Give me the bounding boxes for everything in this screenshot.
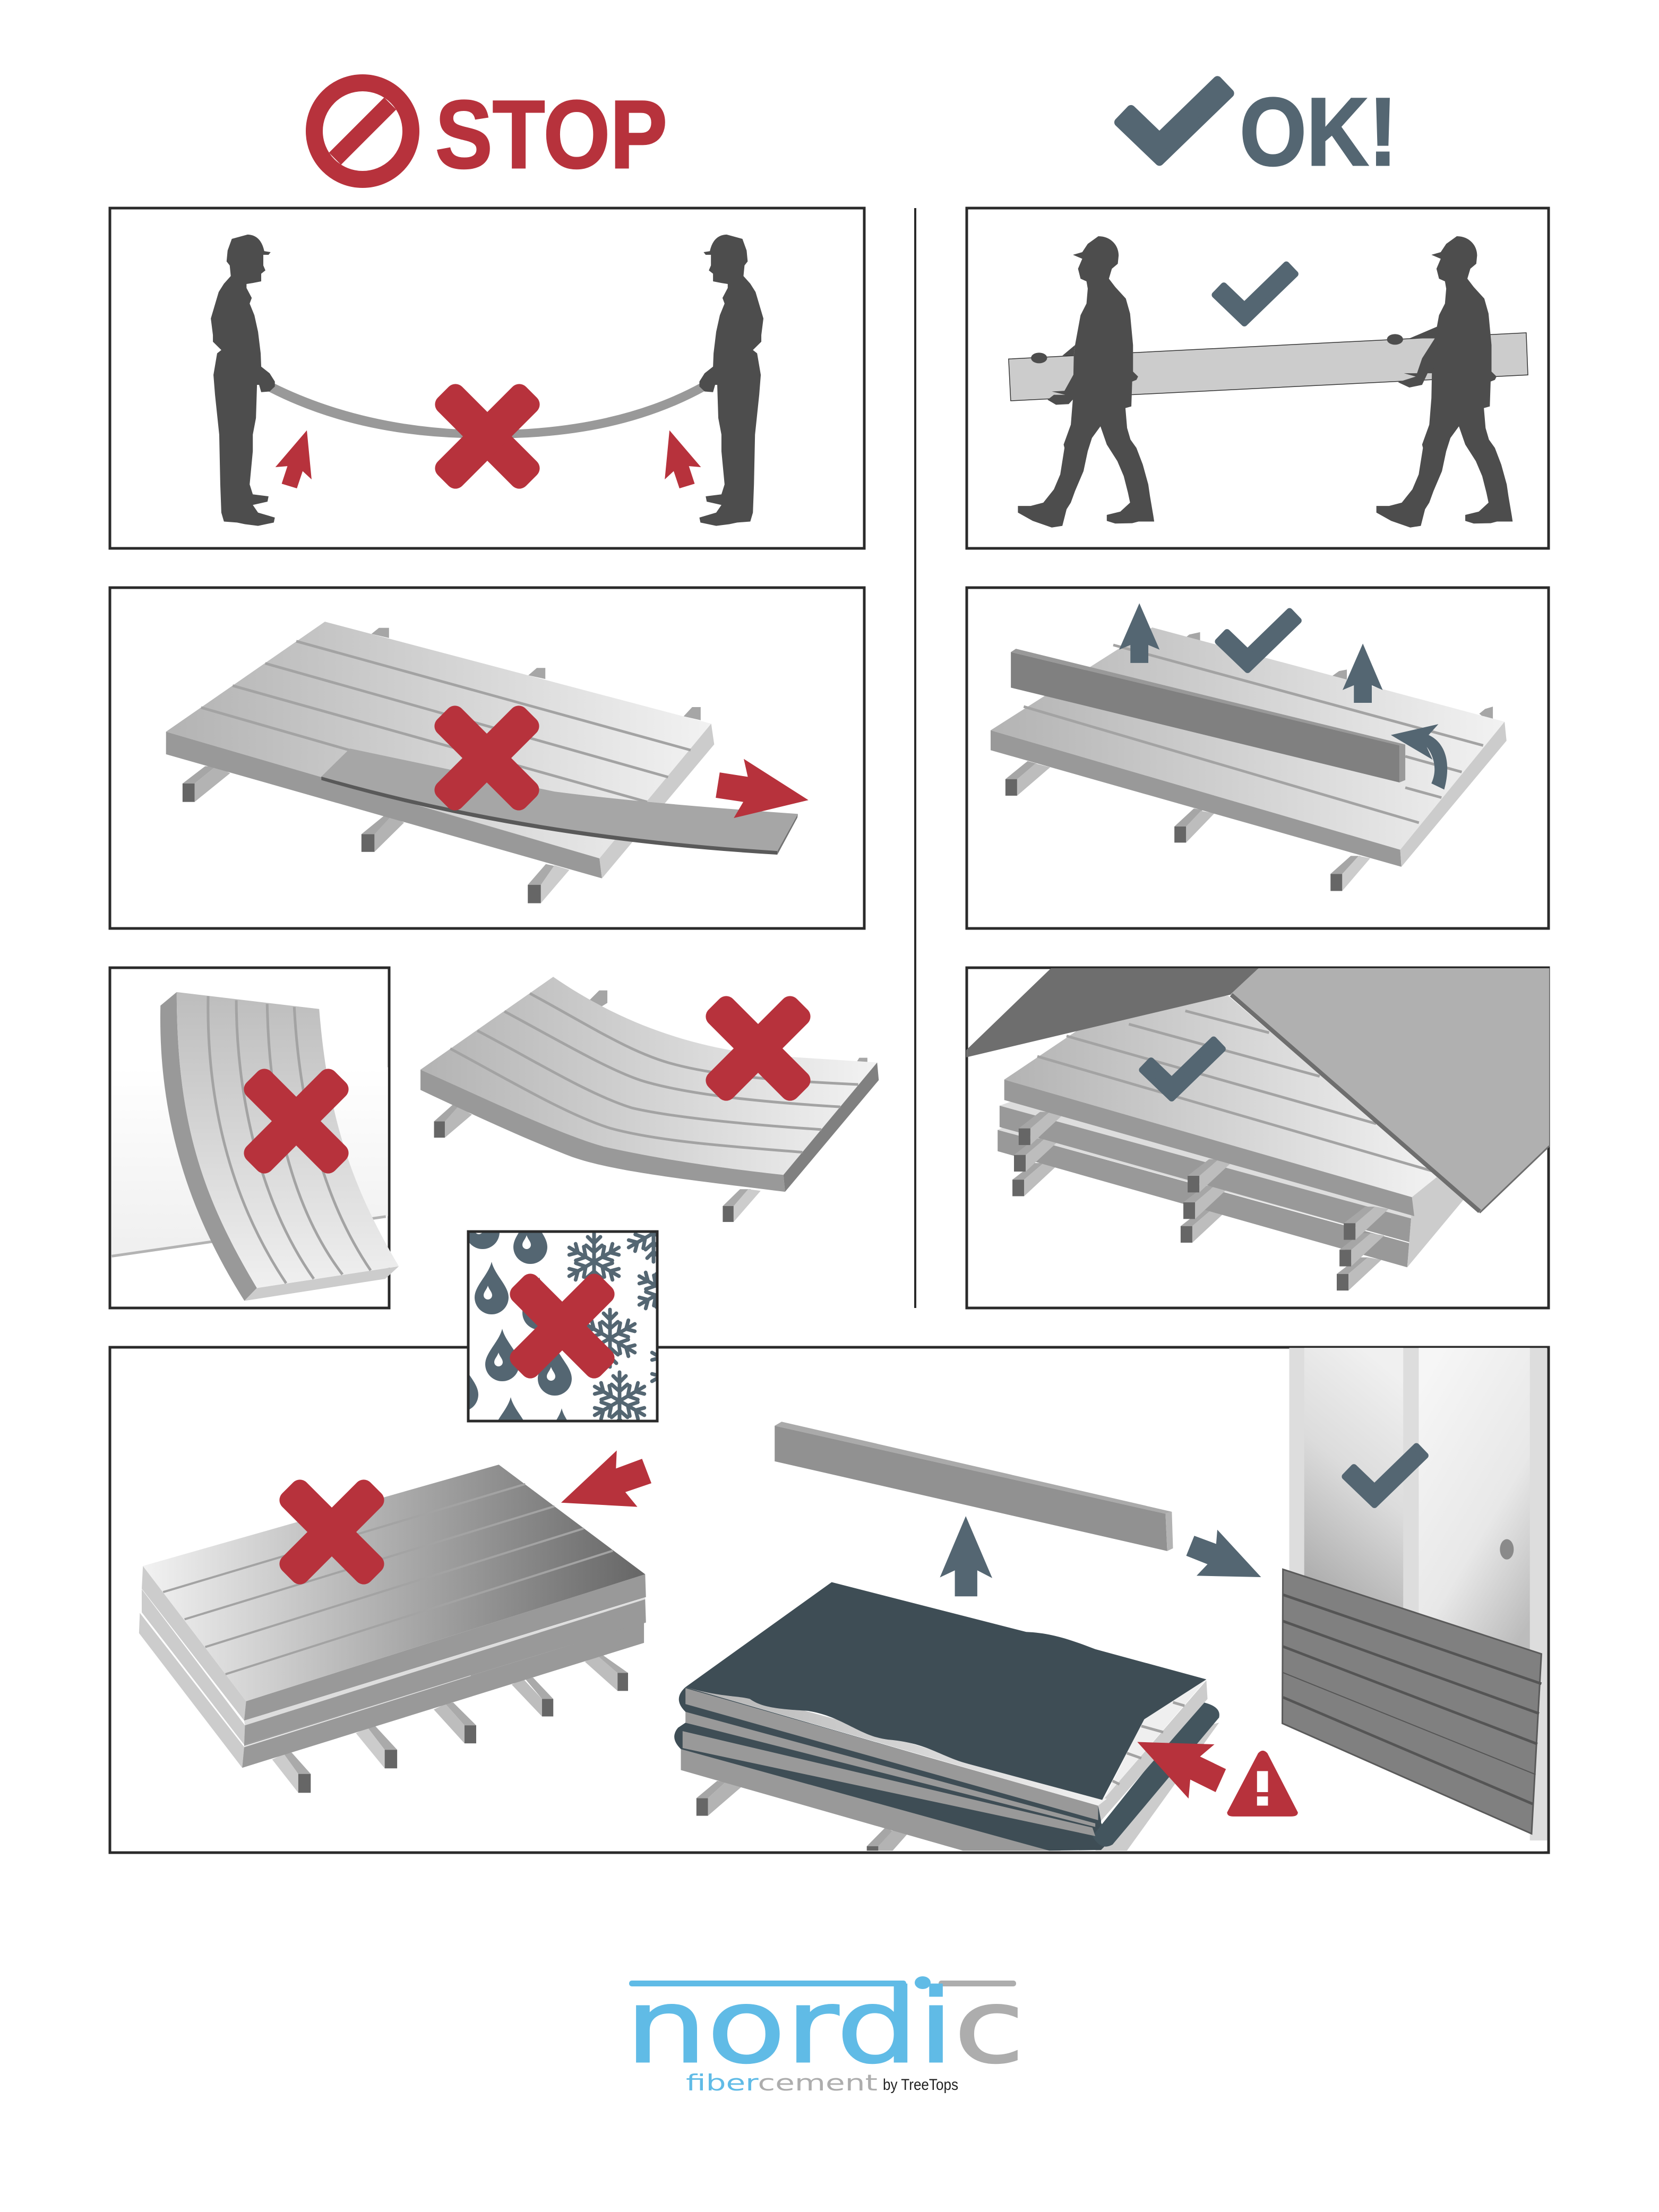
person right [699,235,763,526]
arrow: turn [1391,724,1447,789]
floor and wall [111,1067,388,1257]
heading text: STOP: STOP [435,80,667,188]
joists [183,628,701,903]
bending board [269,383,705,438]
wrapped stack on joists [674,1582,1219,1850]
slab [991,627,1507,867]
icon: red cross [431,380,544,493]
dragged board [321,748,798,855]
logo wordmark: nordi c [625,1968,1025,2086]
heading text: OK!: OK! [1240,78,1397,186]
panel: ok, lift and turn board [967,588,1549,928]
covering sheet, light side [1231,968,1549,1213]
panel: ok, carrying on edge [967,208,1549,548]
heading: STOP [314,80,667,188]
icon: check [1142,1040,1223,1098]
arrow up 1 [1119,603,1159,663]
sagging slab [420,977,879,1222]
arrow: to wall [1186,1530,1261,1577]
icon: red cross leaning [240,1065,353,1177]
icon: big check mark [1119,81,1230,161]
person rear [1377,236,1512,528]
icon: warning triangle [1227,1751,1298,1817]
curved leaning board [160,992,399,1301]
panel: bottom, storing and installing [110,1347,1549,1853]
logo bar blue [629,1981,906,1986]
center divider [914,208,916,1308]
arrow left [276,431,312,488]
siding mounted on wall [1283,1569,1541,1834]
panel: stop, dragging board across the stack [110,588,864,928]
arrow: warning edge [1137,1742,1226,1798]
arrow up 2 [1343,643,1383,703]
slab [166,622,714,879]
icon: red cross [276,1476,388,1588]
logo byline: by TreeTops [883,2076,958,2094]
icon: red cross [431,702,543,814]
wall with door [1290,1348,1547,1852]
logo dot [915,1976,931,1989]
inset: rain and snow [467,1230,658,1423]
arrow: sunlight [561,1450,651,1507]
icon: check [1218,612,1299,670]
lifted board [775,1422,1173,1551]
person front [1018,236,1154,528]
logo: nordic fibercement [625,1968,1025,2096]
panel: stop, curved boards [110,968,879,1308]
logo tagline: fiber cement [686,2070,878,2096]
stacked slabs and joists [998,996,1464,1290]
arrow right [665,431,701,488]
left stack, sun exposed [139,1450,651,1793]
icon: red cross [506,1270,618,1382]
arrow: drag direction [716,759,809,818]
heading: OK [1119,78,1397,186]
lifted board [1011,649,1405,782]
person left [211,235,275,526]
icon: red cross sagging [702,992,814,1105]
icon: check [1215,265,1295,323]
board carried on edge [1009,333,1528,401]
logo bar grey [939,1981,1016,1986]
drops and snowflakes pattern [469,1233,656,1419]
arrow: up [940,1516,992,1596]
panel: ok, covered stack [966,968,1549,1308]
panel: stop, carrying flat and bending [110,208,864,548]
icon: prohibition sign [314,83,411,179]
icon: check [1345,1447,1425,1505]
icon: covering sheet, dark side [966,968,1259,1057]
joists [1005,632,1493,891]
